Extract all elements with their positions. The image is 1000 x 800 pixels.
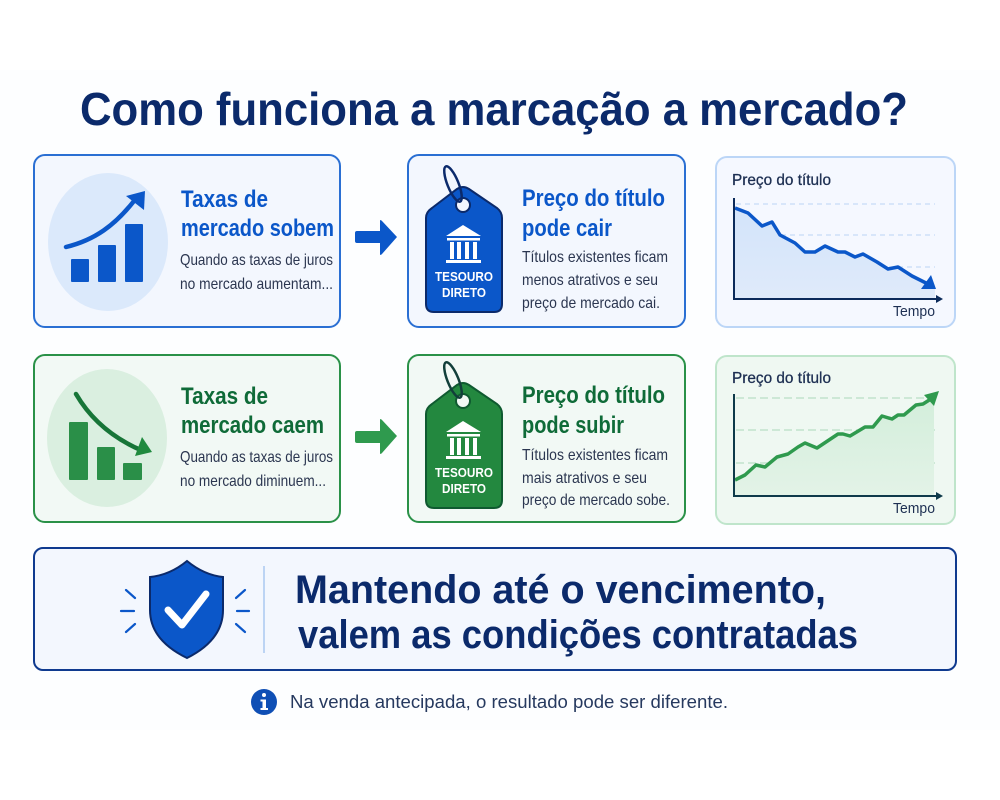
body text: preço de mercado sobe. bbox=[522, 492, 670, 509]
body text: menos atrativos e seu bbox=[522, 272, 658, 289]
body text: Títulos existentes ficam bbox=[522, 447, 668, 464]
heading: Taxas de bbox=[181, 383, 268, 410]
heading: Preço do título bbox=[522, 185, 665, 212]
grid lines bbox=[736, 204, 935, 267]
footnote bbox=[251, 689, 728, 715]
icon: rising bars bbox=[48, 173, 168, 311]
chart label: Preço do título bbox=[732, 370, 831, 387]
panel: preço pode cair bbox=[408, 155, 685, 327]
grid lines bbox=[736, 398, 935, 463]
line bbox=[735, 397, 934, 480]
area bbox=[735, 208, 935, 299]
panel: taxas sobem bbox=[34, 155, 340, 327]
heading: Preço do título bbox=[522, 382, 665, 409]
area bbox=[735, 397, 934, 496]
banner text: Mantendo até o vencimento, bbox=[295, 568, 826, 612]
icon: info bbox=[251, 689, 277, 715]
body text: Quando as taxas de juros bbox=[180, 252, 333, 269]
panel: line chart rising bbox=[716, 356, 955, 524]
icon: price tag: DIRETO bbox=[442, 285, 486, 300]
body text: no mercado aumentam... bbox=[180, 276, 333, 293]
icon: price tag: TESOURO bbox=[435, 465, 493, 480]
heading: Taxas de bbox=[181, 186, 268, 213]
icon: price tag: DIRETO bbox=[442, 481, 486, 496]
title: Como funciona a marcação a mercado? bbox=[80, 83, 908, 135]
panel: preço pode subir bbox=[408, 355, 685, 522]
arrow: blue bbox=[355, 220, 397, 255]
note text: Na venda antecipada, o resultado pode ser diferente. bbox=[290, 692, 728, 712]
body text: preço de mercado cai. bbox=[522, 295, 660, 312]
icon: shield with check bbox=[121, 561, 249, 658]
body text: Quando as taxas de juros bbox=[180, 449, 333, 466]
axis label: Tempo bbox=[893, 303, 935, 320]
heading: mercado caem bbox=[181, 412, 324, 439]
body text: mais atrativos e seu bbox=[522, 470, 647, 487]
divider bbox=[263, 566, 265, 653]
axes bbox=[734, 198, 938, 299]
heading: mercado sobem bbox=[181, 215, 334, 242]
axis label: Tempo bbox=[893, 500, 935, 517]
heading: pode subir bbox=[522, 412, 624, 439]
line bbox=[735, 208, 930, 285]
chart label: Preço do título bbox=[732, 172, 831, 189]
body text: Títulos existentes ficam bbox=[522, 249, 668, 266]
icon: price tag: TESOURO bbox=[435, 269, 493, 284]
icon: price tag bbox=[426, 360, 502, 508]
panel: taxas caem bbox=[34, 355, 340, 522]
arrow: green bbox=[355, 419, 397, 454]
axes bbox=[734, 394, 938, 496]
icon: falling bars bbox=[47, 369, 167, 507]
panel: line chart falling bbox=[716, 157, 955, 327]
body text: no mercado diminuem... bbox=[180, 473, 326, 490]
heading: pode cair bbox=[522, 215, 612, 242]
icon: price tag bbox=[426, 164, 502, 312]
arrowhead bbox=[921, 275, 936, 289]
arrowhead bbox=[924, 391, 939, 406]
banner text: valem as condições contratadas bbox=[298, 613, 858, 657]
banner bbox=[34, 548, 956, 670]
